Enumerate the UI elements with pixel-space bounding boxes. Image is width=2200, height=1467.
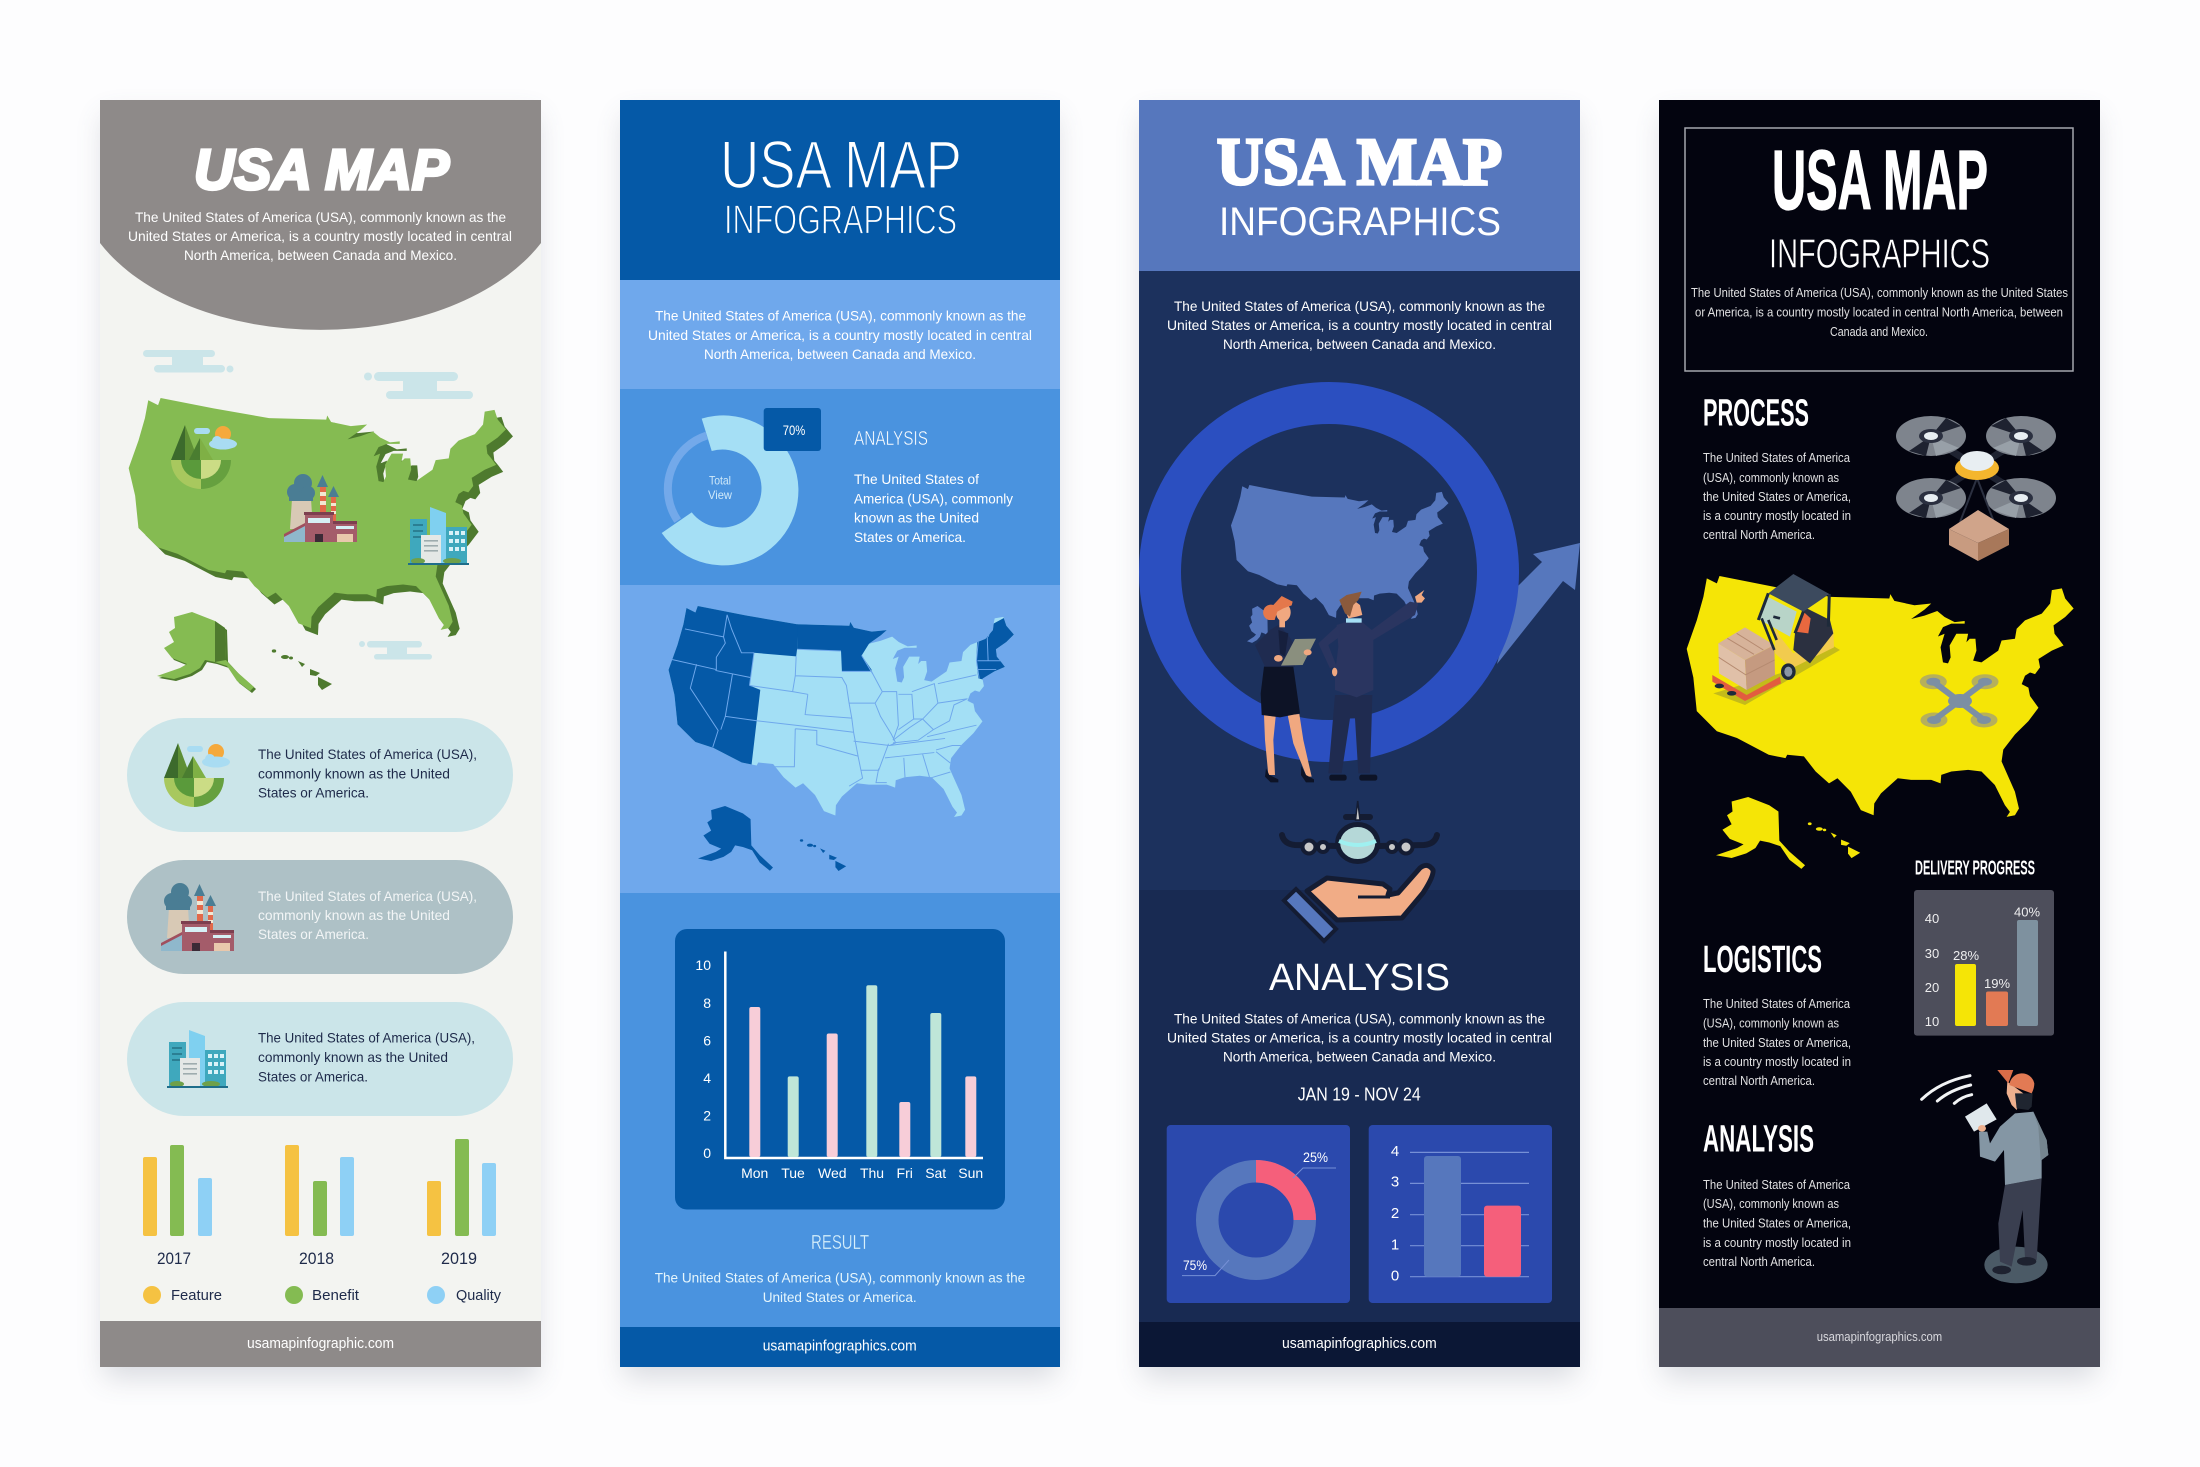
delivery progress chart: 40 — [1925, 911, 1939, 926]
pill: factory: States or America. — [258, 926, 369, 942]
donut chart: 70 percent: Total — [709, 474, 731, 488]
logistics text: (USA), commonly known as — [1703, 1016, 1839, 1030]
analysis text: The United States of America — [1703, 1177, 1851, 1192]
yellow USA map — [1687, 576, 2074, 869]
bar chart: weekdays: 10 — [695, 957, 711, 973]
bar chart: weekdays: Sat — [925, 1165, 946, 1181]
subtitle: INFOGRAPHICS — [1769, 230, 1990, 276]
intro text: North America, between Canada and Mexico. — [1223, 336, 1496, 352]
footer — [100, 1321, 541, 1367]
analysis heading: ANALYSIS — [1703, 1118, 1814, 1160]
panel: blue USA map infographics — [620, 100, 1060, 1367]
panel: navy USA map infographics — [1139, 100, 1580, 1367]
subtitle: INFOGRAPHICS — [724, 197, 957, 243]
legend — [143, 1286, 501, 1304]
intro text: The United States of America (USA), commonly known as the — [135, 209, 506, 225]
pill: forest: The United States of America (USA), — [258, 746, 477, 762]
footer: usamapinfographics.com — [1817, 1329, 1942, 1344]
intro text: or America, is a country mostly located in central North America, between — [1695, 304, 2063, 320]
pill: forest: commonly known as the United — [258, 766, 450, 782]
green USA map — [129, 398, 513, 693]
donut chart: 70 percent: View — [708, 488, 732, 502]
bar chart: 2017 to 2019 — [143, 1139, 496, 1268]
icon: plane over hand — [1282, 801, 1437, 941]
header band — [1139, 100, 1580, 271]
process text: the United States or America, — [1703, 489, 1851, 504]
footer — [620, 1327, 1060, 1367]
donut chart card: 25% — [1303, 1149, 1328, 1165]
donut chart: 70 percent — [662, 408, 821, 565]
analysis text: America (USA), commonly — [854, 490, 1013, 506]
pill: city: The United States of America (USA), — [258, 1030, 475, 1046]
state map — [663, 602, 1026, 817]
analysis text: North America, between Canada and Mexico. — [1223, 1049, 1496, 1065]
title frame — [1685, 128, 2073, 371]
delivery progress chart: 20 — [1925, 980, 1939, 995]
title: USA MAP — [194, 138, 450, 202]
map icon: factory — [284, 474, 357, 542]
logistics text: is a country mostly located in — [1703, 1054, 1851, 1069]
bar chart: weekdays: Sun — [958, 1165, 983, 1181]
donut chart: 70 percent: 70% — [783, 422, 805, 438]
analysis text — [1703, 1177, 1851, 1269]
logistics text: central North America. — [1703, 1073, 1815, 1088]
illustration: delivery drone — [1896, 416, 2056, 561]
delivery progress chart: 30 — [1925, 946, 1939, 961]
result text — [655, 1232, 1025, 1305]
logistics text — [1703, 996, 1851, 1088]
process text: central North America. — [1703, 527, 1815, 542]
pill: city: States or America. — [258, 1068, 368, 1084]
hawaii — [800, 839, 846, 871]
logistics heading: LOGISTICS — [1703, 939, 1822, 981]
pill: city: commonly known as the United — [258, 1049, 448, 1065]
analysis text: the United States or America, — [1703, 1216, 1851, 1230]
bar chart card: 0 — [1391, 1268, 1399, 1285]
bar chart: weekdays: Tue — [781, 1165, 805, 1181]
pill: factory — [127, 860, 513, 974]
analysis text: ANALYSIS — [854, 428, 928, 450]
intro text: United States or America, is a country mostly located in central — [1167, 317, 1552, 333]
alaska — [698, 806, 773, 871]
panel shadows — [104, 116, 2096, 1378]
footer: usamapinfographics.com — [1282, 1336, 1437, 1352]
legend: Quality — [456, 1287, 501, 1304]
result text: United States or America. — [763, 1289, 917, 1305]
analysis text: United States or America, is a country mostly located in central — [1167, 1030, 1552, 1046]
map icon: forest — [171, 425, 237, 489]
logistics text: The United States of America — [1703, 996, 1851, 1011]
bar chart: weekdays: 8 — [703, 995, 711, 1011]
bar chart: 2017 to 2019: 2019 — [441, 1249, 477, 1268]
alaska — [1716, 797, 1805, 869]
bar chart: weekdays: Thu — [860, 1165, 884, 1181]
intro text: The United States of America (USA), commonly known as the United States — [1691, 285, 2068, 300]
bar chart: weekdays: 6 — [703, 1032, 711, 1048]
process text: (USA), commonly known as — [1703, 470, 1839, 485]
alaska — [157, 612, 256, 693]
arrow — [1497, 543, 1580, 664]
bar chart: weekdays: Mon — [741, 1165, 768, 1181]
bar chart card: 4 — [1391, 1143, 1399, 1160]
map section — [620, 585, 1060, 893]
header band — [620, 100, 1060, 280]
delivery progress chart: 19% — [1984, 976, 2010, 991]
pill: city — [127, 1002, 513, 1116]
pill: factory: commonly known as the United — [258, 907, 450, 923]
process heading: PROCESS — [1703, 392, 1809, 434]
clouds — [143, 350, 473, 660]
pill: factory: The United States of America (USA), — [258, 888, 477, 904]
logistics text: the United States or America, — [1703, 1035, 1851, 1050]
analysis text: is a country mostly located in — [1703, 1235, 1851, 1250]
blue USA map — [1231, 485, 1448, 649]
analysis text — [1167, 1010, 1552, 1065]
intro section — [620, 280, 1060, 389]
analysis text: The United States of America (USA), commonly known as the — [1174, 1010, 1545, 1026]
intro text — [1167, 298, 1552, 352]
delivery progress chart — [1914, 890, 2054, 1036]
bar chart: weekdays: Fri — [897, 1165, 913, 1181]
intro section: The United States of America (USA), commonly known as the — [655, 308, 1026, 324]
analysis text: central North America. — [1703, 1254, 1815, 1269]
analysis text: The United States of — [854, 471, 979, 487]
pill: forest — [127, 718, 513, 832]
bar chart card: 3 — [1391, 1173, 1399, 1190]
title: USA MAP — [1217, 125, 1502, 199]
analysis text: known as the United — [854, 510, 979, 526]
ring — [1160, 403, 1498, 741]
bar chart: 2017 to 2019: 2017 — [157, 1249, 191, 1268]
bar chart: 2017 to 2019: 2018 — [299, 1249, 334, 1268]
intro text — [128, 209, 512, 263]
delivery progress heading: DELIVERY PROGRESS — [1915, 858, 2035, 880]
result text: RESULT — [811, 1232, 869, 1254]
date range: JAN 19 - NOV 24 — [1298, 1085, 1421, 1105]
intro section: United States or America, is a country mostly located in central — [648, 327, 1032, 343]
illustration: woman with tablet — [1255, 596, 1316, 782]
bar chart card: 2 — [1391, 1205, 1399, 1222]
hawaii — [1808, 822, 1860, 858]
footer: usamapinfographic.com — [247, 1336, 394, 1352]
title: USA MAP — [720, 127, 962, 203]
analysis text — [854, 428, 1013, 545]
result text: The United States of America (USA), commonly known as the — [655, 1269, 1025, 1285]
subtitle: INFOGRAPHICS — [1219, 200, 1501, 244]
intro text: United States or America, is a country mostly located in central — [128, 228, 512, 244]
donut chart card — [1167, 1125, 1350, 1303]
intro text: The United States of America (USA), commonly known as the — [1174, 298, 1545, 314]
title: USA MAP — [1772, 133, 1988, 227]
bar chart: weekdays: 0 — [703, 1145, 711, 1161]
intro text: Canada and Mexico. — [1830, 324, 1928, 339]
bar chart: weekdays: 4 — [703, 1070, 711, 1086]
donut chart card: 75% — [1183, 1257, 1207, 1273]
panel: black and yellow USA map infographics — [1659, 100, 2100, 1367]
process text: is a country mostly located in — [1703, 508, 1851, 523]
intro text: North America, between Canada and Mexico. — [184, 247, 457, 263]
footer — [1139, 1322, 1580, 1367]
footer: usamapinfographics.com — [763, 1338, 917, 1354]
intro text — [1691, 285, 2068, 339]
illustration: man pointing — [1318, 590, 1425, 781]
illustration: worker with tablet — [1922, 1070, 2048, 1283]
legend: Feature — [171, 1287, 222, 1304]
delivery progress chart: 28% — [1953, 948, 1979, 963]
analysis text: States or America. — [854, 529, 966, 545]
illustration: forklift with boxes — [1712, 574, 1840, 705]
bar chart: weekdays — [675, 929, 1005, 1210]
delivery progress chart: 40% — [2014, 905, 2040, 920]
bar chart card — [1369, 1125, 1552, 1303]
header curved band — [100, 100, 541, 330]
bar chart card: 1 — [1391, 1237, 1399, 1254]
process text — [1703, 450, 1851, 542]
bar chart: weekdays: Wed — [818, 1165, 847, 1181]
pill: forest: States or America. — [258, 784, 369, 800]
legend: Benefit — [312, 1287, 360, 1304]
footer — [1659, 1308, 2100, 1367]
map icon: city — [408, 507, 469, 565]
analysis heading: ANALYSIS — [1269, 957, 1450, 999]
panel: grey and green USA map — [100, 100, 541, 1367]
bar chart: weekdays: 2 — [703, 1108, 711, 1124]
analysis text: (USA), commonly known as — [1703, 1196, 1839, 1211]
intro section: North America, between Canada and Mexico. — [704, 346, 976, 362]
hawaii — [272, 649, 332, 690]
process text: The United States of America — [1703, 450, 1851, 465]
delivery progress chart: 10 — [1925, 1014, 1939, 1029]
icon: drone shape on map — [1920, 674, 1998, 728]
